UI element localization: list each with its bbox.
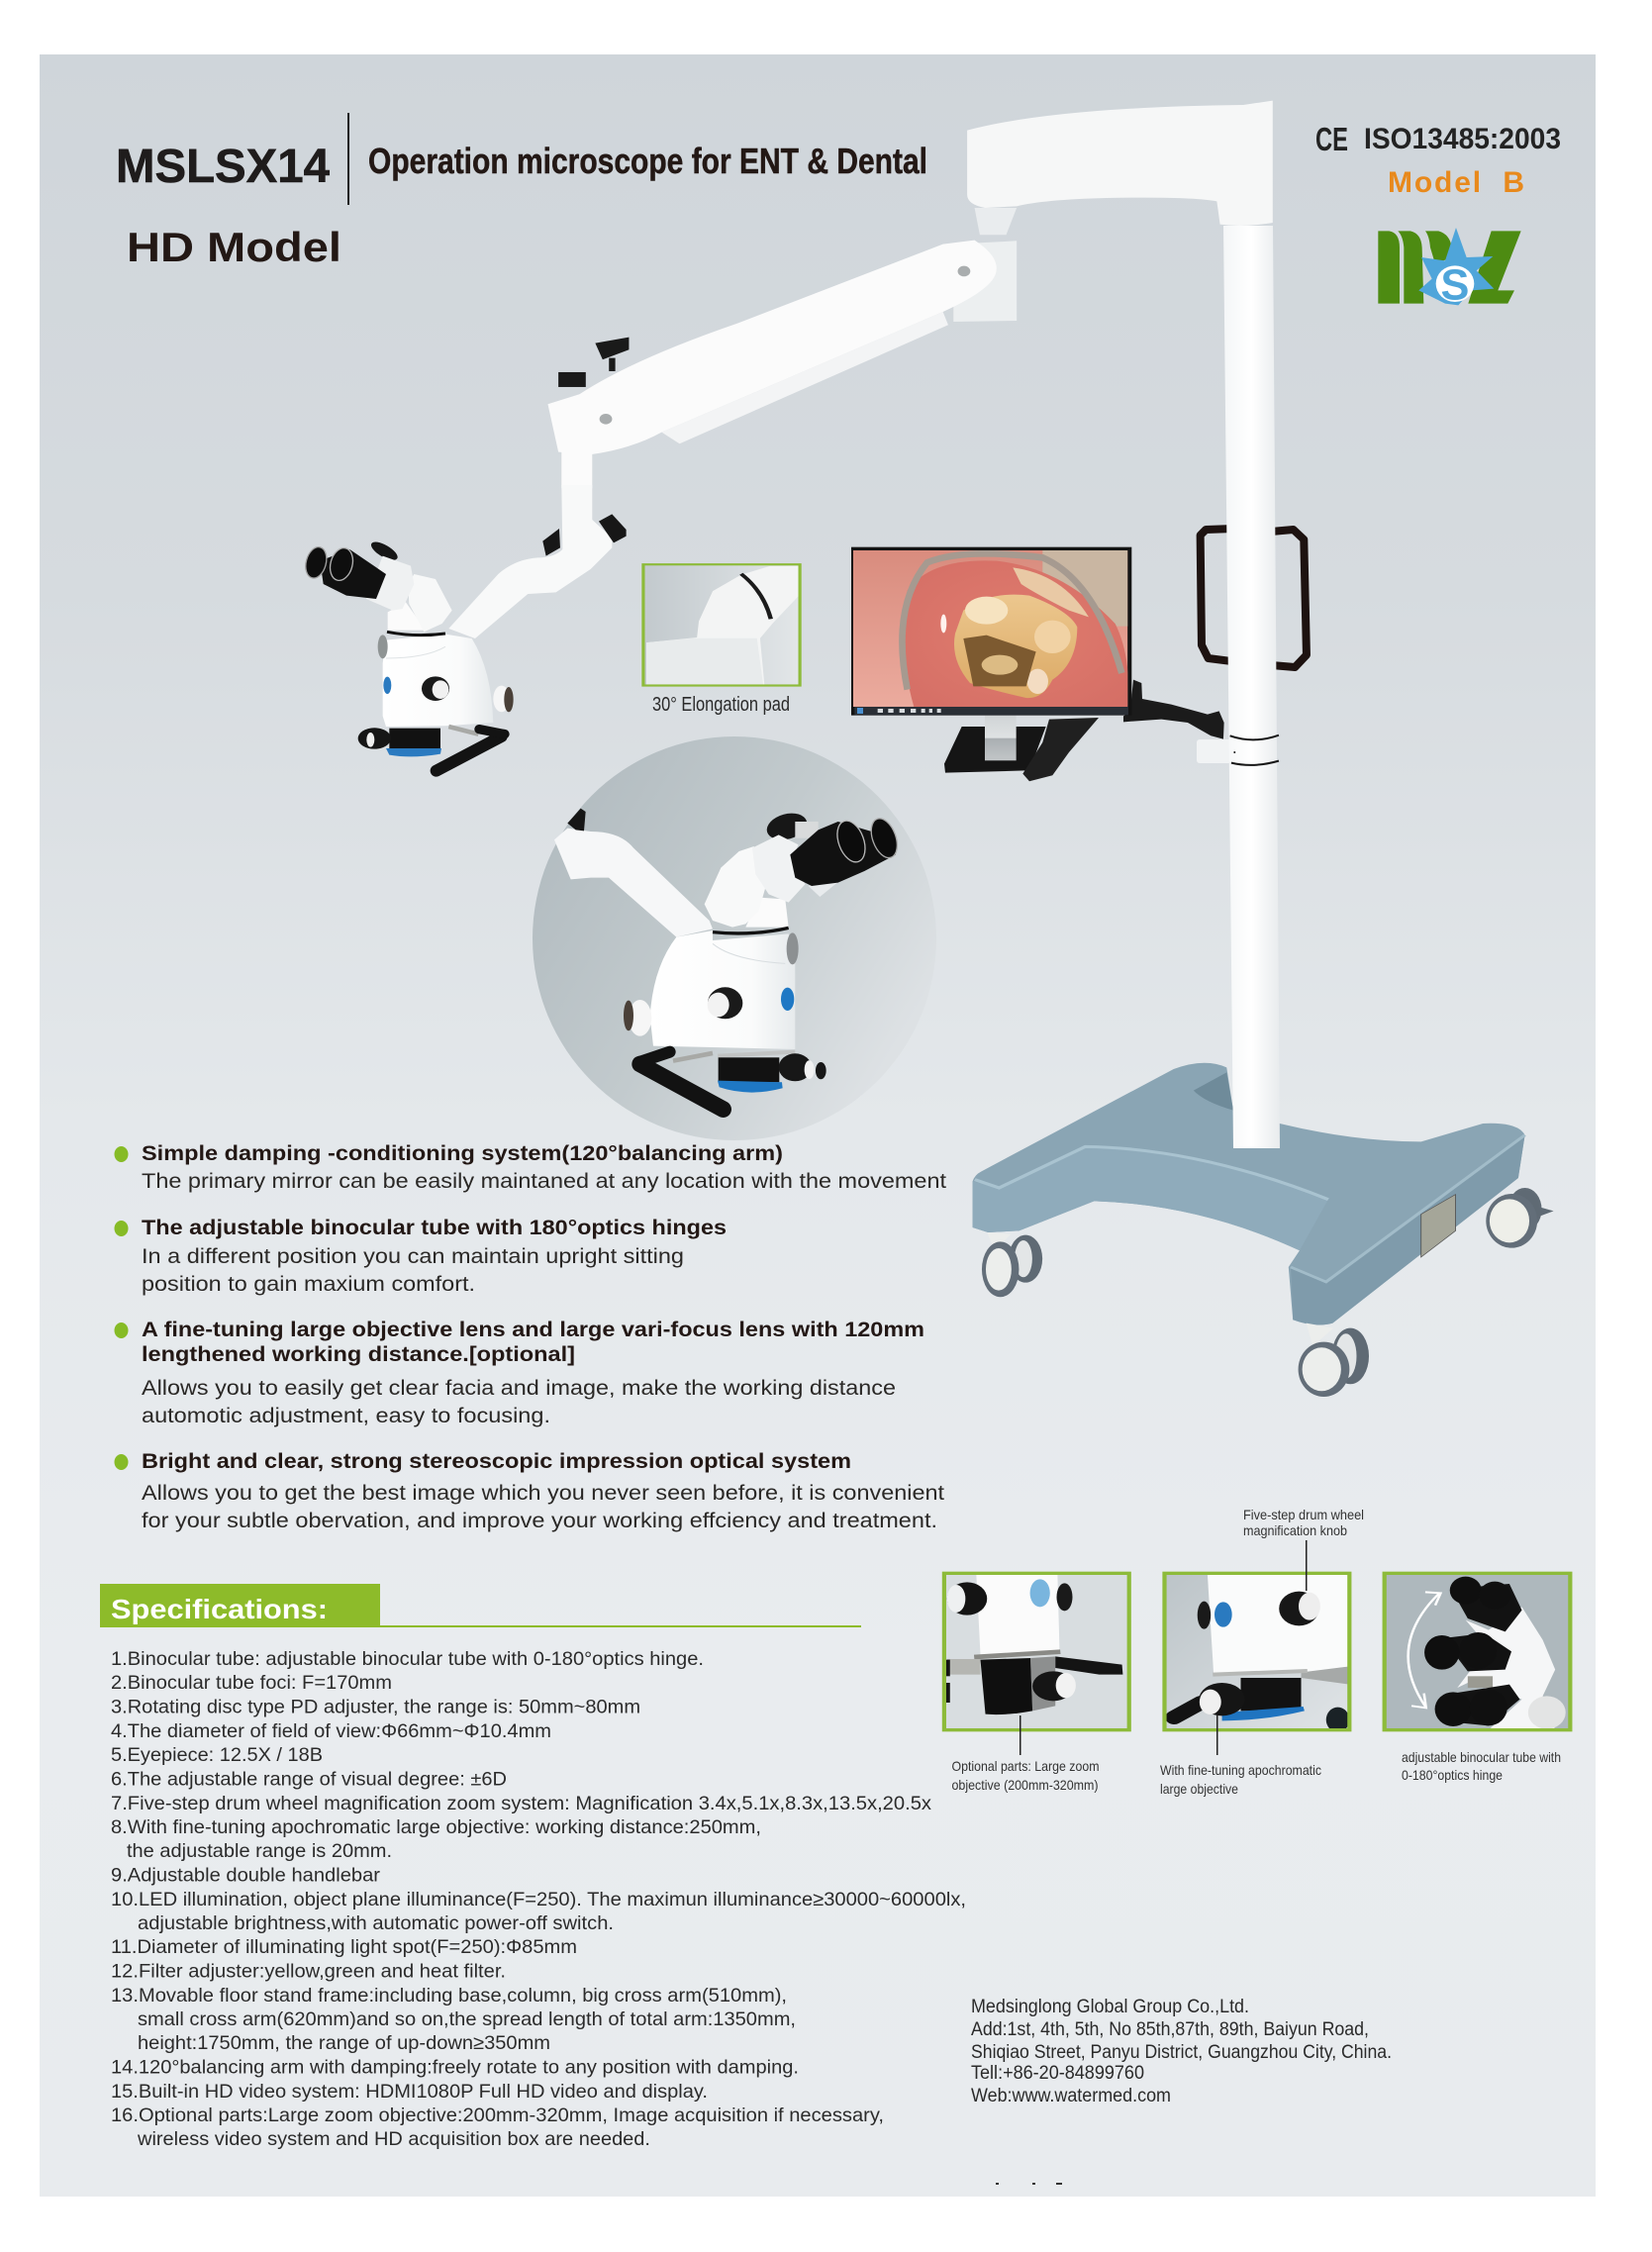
- binocular tube: [320, 549, 386, 599]
- lower plate: [661, 312, 948, 443]
- main body: [383, 635, 493, 727]
- subtitle: HD Model: HD Model: [127, 224, 341, 270]
- Model B label: Model B: [1388, 166, 1526, 199]
- monitor foot: [944, 727, 1046, 773]
- clipped text remnants at bottom: [996, 2183, 1062, 2185]
- CE mark: CE: [1315, 121, 1348, 157]
- feature 2: [115, 1217, 727, 1296]
- neck joint: [975, 208, 1017, 235]
- caption: large zoom objective: objective (200mm-320mm): [952, 1777, 1099, 1793]
- title divider: [347, 113, 349, 205]
- specifications list: wireless video system and HD acquisition box are needed.: [137, 2128, 650, 2150]
- zoom knob: [422, 676, 449, 701]
- screen taskbar: [854, 707, 1128, 715]
- elbow of head: [409, 574, 452, 632]
- hinge screws: [958, 266, 970, 276]
- feature 1: The primary mirror can be easily maintaned at any location with the movement: [142, 1170, 946, 1193]
- company contact block: Tell:+86-20-84899760: [971, 2063, 1144, 2084]
- feature 1: [115, 1142, 946, 1193]
- specifications list: 14.120°balancing arm with damping:freely rotate to any position with damping.: [111, 2057, 799, 2079]
- blue logo: [781, 988, 794, 1011]
- company contact block: [971, 1997, 1392, 2106]
- photo thumbnails: [944, 1573, 1570, 1732]
- thumbnail: binocular tube positions: [1385, 1573, 1570, 1730]
- side clamp: [378, 635, 388, 658]
- specifications list: 12.Filter adjuster:yellow,green and heat filter.: [111, 1960, 506, 1982]
- monitor neck: [985, 716, 1017, 760]
- logo dot: [383, 677, 391, 694]
- specifications list: adjustable brightness,with automatic power-off switch.: [138, 1912, 614, 1934]
- specifications list: 11.Diameter of illuminating light spot(F=250):Φ85mm: [111, 1936, 577, 1958]
- caster front left: [982, 1232, 1042, 1297]
- specifications list: small cross arm(620mm)and so on,the spread length of total arm:1350mm,: [138, 2008, 796, 2030]
- specifications list: [111, 1648, 966, 2150]
- prism housing: [366, 556, 414, 611]
- caption: binocular tube: 0-180°optics hinge: [1402, 1767, 1503, 1783]
- specifications list: 1.Binocular tube: adjustable binocular tube with 0-180°optics hinge.: [111, 1648, 704, 1670]
- side knob: [493, 686, 510, 712]
- dental photo: [853, 550, 1128, 707]
- specifications list: 4.The diameter of field of view:Φ66mm~Φ10.4mm: [111, 1720, 551, 1742]
- feature 2: The adjustable binocular tube with 180°optics hinges: [142, 1217, 727, 1239]
- floor base with casters: [973, 1063, 1554, 1397]
- company contact block: Medsinglong Global Group Co.,Ltd.: [971, 1997, 1249, 2017]
- specifications heading: [100, 1584, 861, 1627]
- handle: [638, 1052, 724, 1110]
- specifications list: 13.Movable floor stand frame:including base,column, big cross arm(510mm),: [111, 1985, 787, 2007]
- objective: [389, 729, 440, 749]
- icon: MSZ logo: [1378, 228, 1521, 310]
- left knob: [358, 728, 391, 749]
- caption: apochromatic objective: [1160, 1714, 1321, 1797]
- head band: [713, 928, 789, 933]
- company contact block: Shiqiao Street, Panyu District, Guangzhou City, China.: [971, 2042, 1392, 2063]
- feature 2: In a different position you can maintain upright sitting: [142, 1245, 684, 1268]
- monitor support arm: [1123, 680, 1224, 739]
- elbow knobs: [542, 514, 627, 556]
- caster rear right: [1486, 1188, 1554, 1248]
- overhead cross arm: [547, 101, 1273, 454]
- right arm front face: [1291, 1135, 1525, 1325]
- head band: [387, 632, 445, 636]
- plate: [718, 1052, 795, 1056]
- caption: large zoom objective: [952, 1715, 1099, 1793]
- main arm: [547, 241, 997, 454]
- specifications list: 2.Binocular tube foci: F=170mm: [111, 1672, 392, 1694]
- specifications list: 10.LED illumination, object plane illuminance(F=250). The maximun illuminance≥30000~60000lx,: [111, 1889, 966, 1910]
- arm elbow: [448, 485, 612, 638]
- neck: [388, 602, 426, 631]
- certification line: [1315, 121, 1561, 157]
- objective: [719, 1057, 779, 1082]
- silver bar: [673, 1053, 713, 1061]
- icon: MSZ logo: S: [1441, 262, 1469, 310]
- column collar: [1230, 735, 1279, 765]
- monitor bezel: [851, 547, 1131, 716]
- caption: five-step drum wheel: magnification knob: [1243, 1522, 1347, 1538]
- monitor on arm: [851, 547, 1224, 781]
- zoom knob: [708, 987, 742, 1019]
- top knob: [368, 539, 400, 563]
- feature 2: position to gain maxium comfort.: [142, 1273, 475, 1296]
- specifications list: 15.Built-in HD video system: HDMI1080P Full HD video and display.: [111, 2081, 708, 2103]
- thumbnail: large zoom objective: [944, 1573, 1129, 1730]
- silver bar: [448, 727, 478, 734]
- specifications list: 16.Optional parts:Large zoom objective:200mm-320mm, Image acquisition if necessary,: [111, 2105, 884, 2126]
- feature 3: automotic adjustment, easy to focusing.: [142, 1405, 550, 1427]
- specifications list: 6.The adjustable range of visual degree: ±6D: [111, 1768, 507, 1790]
- feature 4: [115, 1450, 944, 1532]
- feature 4: for your subtle obervation, and improve your working effciency and treatment.: [142, 1510, 937, 1532]
- arm: [554, 829, 713, 937]
- monitor handle bracket: [1201, 529, 1307, 667]
- left arm front face: [973, 1146, 1328, 1250]
- neck: [745, 898, 789, 928]
- title: model number: MSLSX14: [116, 141, 330, 193]
- specifications list: the adjustable range is 20mm.: [127, 1840, 392, 1862]
- caption: five-step drum wheel: [1243, 1507, 1364, 1591]
- head elbow: [705, 846, 765, 928]
- keyboard tray: [1022, 718, 1099, 781]
- backdrop disc: [533, 736, 936, 1140]
- left knob: [629, 1000, 651, 1036]
- caption: apochromatic objective: large objective: [1160, 1781, 1238, 1797]
- small microscope view: [303, 448, 627, 771]
- base silhouette: [973, 1063, 1525, 1325]
- caster front right: [1299, 1323, 1369, 1397]
- specifications list: 8.With fine-tuning apochromatic large objective: working distance:250mm,: [111, 1816, 761, 1838]
- circular close-up of microscope: [533, 736, 936, 1140]
- caption: large zoom objective: Optional parts: Large zoom: [952, 1758, 1099, 1774]
- title: product name: Operation microscope for ENT & Dental: [368, 141, 927, 181]
- feature 3: A fine-tuning large objective lens and large vari-focus lens with 120mm: [142, 1319, 924, 1341]
- caption: binocular tube: [1402, 1749, 1561, 1783]
- feature 3: Allows you to easily get clear facia and image, make the working distance: [142, 1377, 896, 1400]
- company contact block: Add:1st, 4th, 5th, No 85th,87th, 89th, Baiyun Road,: [971, 2019, 1369, 2040]
- prism housing: [752, 834, 805, 903]
- column clamp: [1197, 739, 1246, 763]
- base notch: [1194, 1072, 1233, 1111]
- handle: [437, 730, 505, 771]
- specifications list: height:1750mm, the range of up-down≥350mm: [138, 2032, 550, 2054]
- caption: binocular tube: adjustable binocular tube with: [1402, 1749, 1561, 1765]
- specifications list: 3.Rotating disc type PD adjuster, the range is: 50mm~80mm: [111, 1697, 640, 1718]
- thumbnail: apochromatic objective: [1164, 1573, 1349, 1732]
- support column: [1223, 226, 1280, 1148]
- feature 4: Bright and clear, strong stereoscopic impression optical system: [142, 1450, 851, 1473]
- feature 1: Simple damping -conditioning system(120°balancing arm): [142, 1142, 783, 1165]
- company contact block: Web:www.watermed.com: [971, 2086, 1171, 2106]
- specifications list: 9.Adjustable double handlebar: [111, 1865, 381, 1887]
- eyepiece tube: [790, 822, 896, 886]
- caption: apochromatic objective: With fine-tuning apochromatic: [1160, 1762, 1321, 1778]
- upper tube: [561, 448, 592, 488]
- rating plate: [1421, 1195, 1455, 1257]
- inset caption: 30° Elongation pad: [652, 694, 790, 716]
- ISO number: ISO13485:2003: [1364, 123, 1561, 155]
- inset: 30 degree elongation pad: [643, 564, 801, 686]
- body: [650, 930, 795, 1049]
- caption: five-step drum wheel: Five-step drum wheel: [1243, 1507, 1364, 1522]
- specifications heading: Specifications:: [111, 1594, 328, 1624]
- rear bracket: [953, 241, 1017, 322]
- specifications list: 7.Five-step drum wheel magnification zoom system: Magnification 3.4x,5.1x,8.3x,13.5x,20.5x: [111, 1793, 931, 1814]
- side clamp: [787, 932, 799, 964]
- feature 3: lengthened working distance.[optional]: [142, 1343, 575, 1366]
- specifications list: 5.Eyepiece: 12.5X / 18B: [111, 1744, 323, 1766]
- column cap: [967, 101, 1273, 226]
- feature 4: Allows you to get the best image which you never seen before, it is convenient: [142, 1482, 944, 1505]
- features list: [115, 1142, 946, 1532]
- top knob: [764, 809, 810, 844]
- feature 3: [115, 1319, 924, 1427]
- right knob: [779, 1053, 812, 1081]
- arm knobs: [558, 338, 629, 387]
